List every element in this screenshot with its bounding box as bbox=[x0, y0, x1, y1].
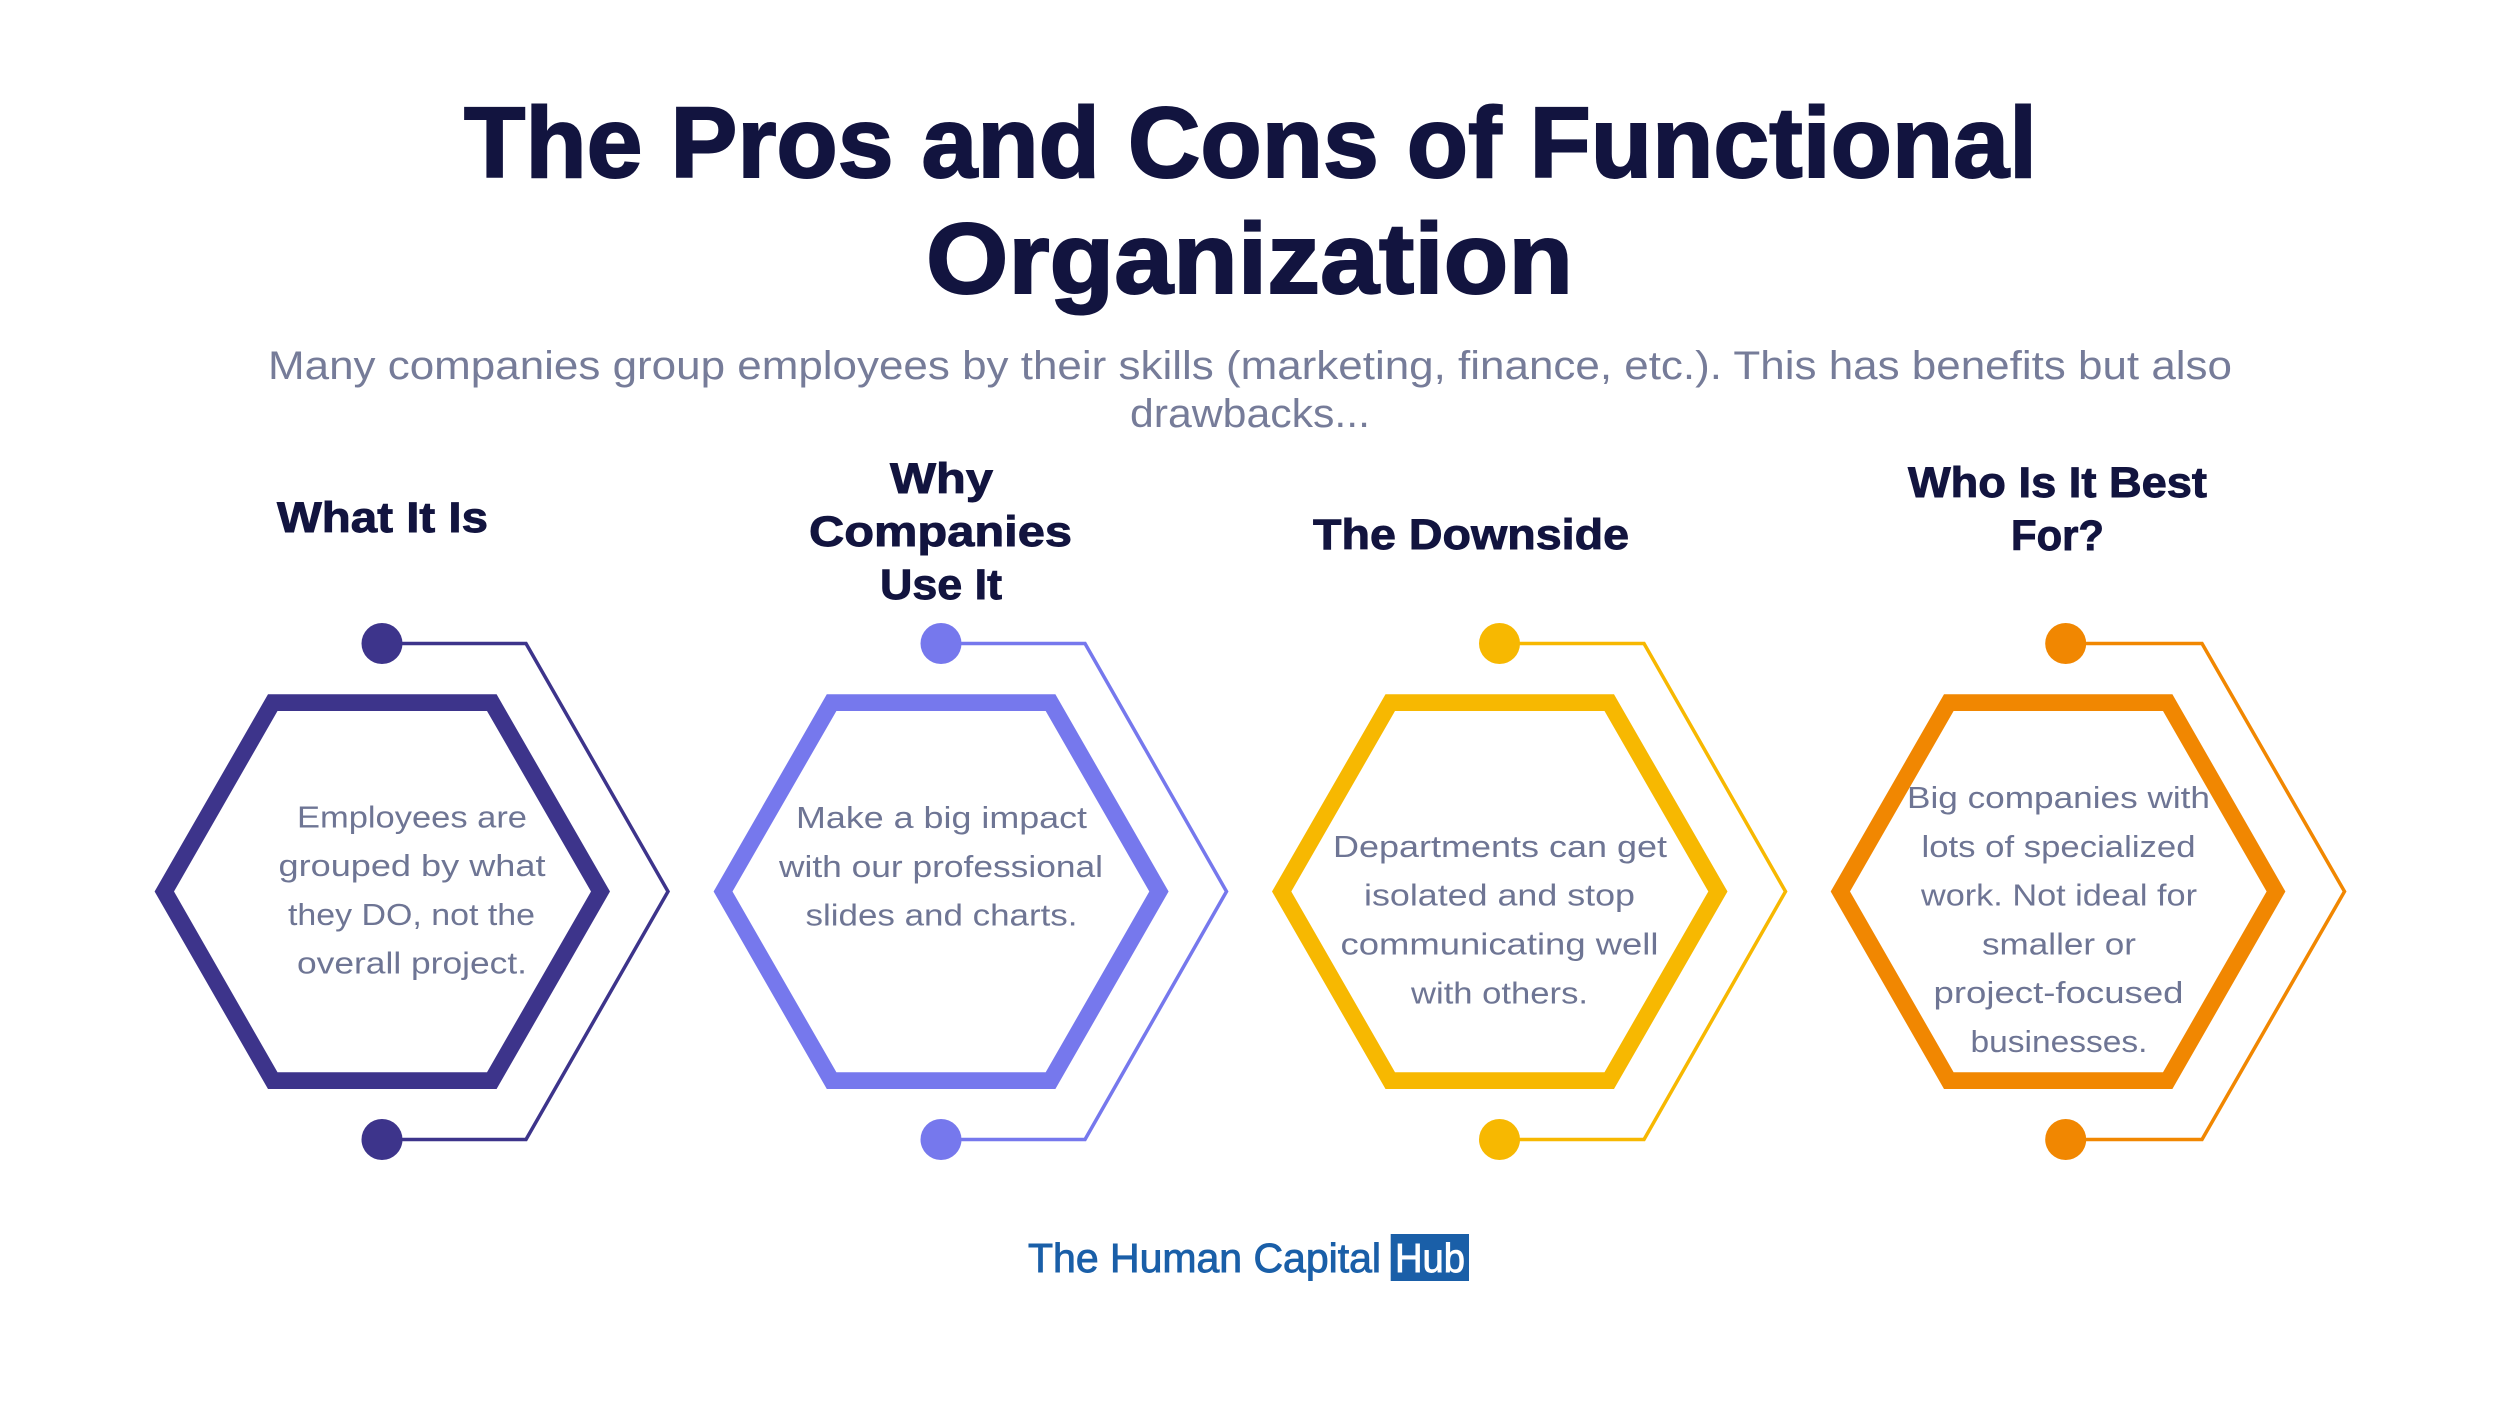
hexagon bbox=[155, 694, 610, 1089]
connector line bbox=[941, 644, 1226, 1140]
bottom dot bbox=[920, 1119, 962, 1160]
body text: slides and charts. bbox=[806, 898, 1078, 932]
heading: Why Companies Use It: Companies bbox=[809, 508, 1072, 556]
bottom dot bbox=[2045, 1119, 2086, 1160]
heading: The Downside: The Downside bbox=[1313, 511, 1629, 559]
body text: communicating well bbox=[1340, 926, 1658, 962]
body text: work. Not ideal for bbox=[1920, 878, 2197, 912]
bottom dot bbox=[1479, 1119, 1520, 1160]
bottom dot bbox=[362, 1119, 402, 1160]
body text: Make a big impact bbox=[796, 800, 1087, 835]
connector line bbox=[382, 644, 668, 1140]
connector line bbox=[2066, 644, 2344, 1140]
title: Organization bbox=[926, 203, 1573, 315]
heading: Why Companies Use It bbox=[809, 455, 1072, 609]
body text: project-focused bbox=[1934, 975, 2184, 1010]
body text: with our professional bbox=[778, 849, 1103, 884]
body text: Big companies with bbox=[1907, 780, 2210, 815]
top dot bbox=[1479, 623, 1520, 664]
hexagon bbox=[1831, 694, 2285, 1089]
panel: Who Is It Best For? bbox=[1831, 459, 2344, 1160]
body text: lots of specialized bbox=[1922, 829, 2196, 864]
panel: The Downside bbox=[1272, 511, 1786, 1160]
heading: Who Is It Best For?: For? bbox=[2011, 512, 2104, 560]
logo: The Human Capital Hub: The Human Capital bbox=[1028, 1235, 1381, 1281]
body text: grouped by what bbox=[278, 848, 546, 883]
heading: Who Is It Best For?: Who Is It Best bbox=[1908, 459, 2207, 507]
heading: Who Is It Best For? bbox=[1908, 459, 2207, 560]
heading: Why Companies Use It: Use It bbox=[880, 561, 1002, 609]
title: The Pros and Cons of Functional bbox=[464, 87, 2037, 199]
connector line bbox=[1500, 644, 1786, 1140]
subtitle: Many companies group employees by their skills (marketing, finance, etc.). This has benefits but also bbox=[268, 344, 2232, 388]
body text: they DO, not the bbox=[288, 897, 535, 932]
hexagon bbox=[1272, 694, 1728, 1089]
body text: overall project. bbox=[297, 946, 527, 980]
top dot bbox=[920, 623, 962, 664]
heading: What It Is: What It Is bbox=[277, 494, 488, 542]
hexagon bbox=[714, 694, 1169, 1089]
body text: smaller or bbox=[1982, 926, 2136, 962]
body text bbox=[278, 800, 546, 980]
panel: Why Companies Use It bbox=[714, 455, 1226, 1160]
body text: Employees are bbox=[297, 800, 527, 834]
body text: businesses. bbox=[1970, 1024, 2148, 1059]
body text bbox=[778, 800, 1103, 932]
body text: with others. bbox=[1410, 976, 1588, 1010]
heading: Why Companies Use It: Why bbox=[890, 455, 993, 503]
top dot bbox=[362, 623, 402, 664]
title bbox=[464, 87, 2037, 315]
panel: What It Is bbox=[155, 494, 668, 1160]
body text: Departments can get bbox=[1333, 829, 1667, 864]
body text: isolated and stop bbox=[1364, 878, 1635, 912]
subtitle: drawbacks... bbox=[1130, 392, 1370, 436]
top dot bbox=[2045, 623, 2086, 664]
logo: The Human Capital Hub: Hub bbox=[1395, 1235, 1465, 1281]
body text bbox=[1333, 829, 1667, 1010]
body text bbox=[1907, 780, 2210, 1059]
subtitle bbox=[268, 344, 2232, 436]
